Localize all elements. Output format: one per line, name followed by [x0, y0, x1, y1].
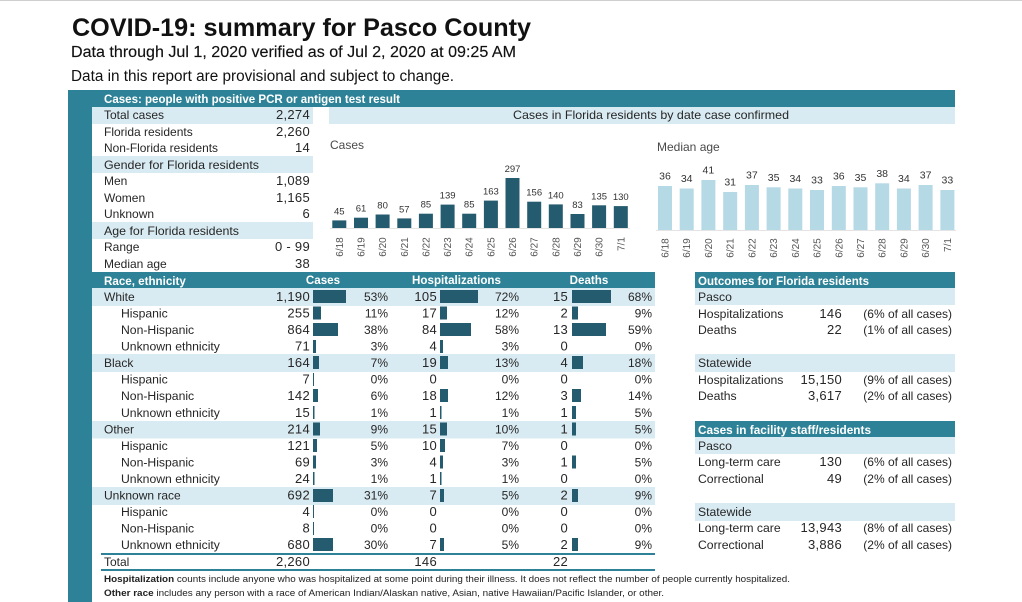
bar chart: median age: 7/1 [943, 238, 954, 252]
table header band: Hospitalizations [412, 274, 501, 287]
panel: outcomes for Florida residents [695, 272, 955, 403]
row: Black Non-Hispanic: 6% [371, 389, 388, 403]
row: White Hispanic: 9% [635, 306, 652, 320]
row: Statewide long-term care: 13,943 [800, 520, 842, 535]
row: Total: Total [104, 555, 129, 569]
row: White Non-Hispanic: 864 [287, 322, 310, 337]
table header band [92, 272, 655, 288]
row: Unknown race Non-Hispanic: 0% [502, 522, 519, 536]
row: Unknown race: 2 [560, 488, 568, 502]
row: Pasco hospitalizations: 146 [819, 306, 842, 321]
row: Unknown race: 5% [502, 488, 519, 502]
title: COVID-19: summary for Pasco County [72, 14, 531, 42]
row: Other unknown ethnicity: 1% [371, 472, 388, 486]
row: Other Hispanic: 0 [560, 438, 568, 453]
row: Black: 19 [422, 355, 437, 370]
row: Statewide correctional: (2% of all cases) [863, 538, 952, 552]
row: age heading: Age for Florida residents [104, 224, 239, 238]
row: Other unknown ethnicity: Unknown ethnicity [121, 472, 221, 486]
row: Statewide heading: Statewide [698, 356, 752, 370]
row: Other: 5% [635, 422, 652, 436]
row: women [104, 190, 310, 205]
row: White Hispanic: 12% [495, 306, 519, 320]
row: Unknown race Non-Hispanic: 8 [302, 520, 310, 536]
row: White Hispanic: 255 [287, 306, 310, 320]
row: White Non-Hispanic: 13 [553, 322, 568, 337]
row: Unknown race Hispanic: 0% [635, 505, 652, 519]
bar chart: daily cases: 6/22 [421, 237, 432, 257]
row: White Non-Hispanic [121, 322, 652, 337]
footnote: hospitalization: Hospitalization counts include anyone who was hospitalized at some point during their illness. It does not reflect the number of people currently hospitalized. [104, 574, 790, 584]
row: Pasco long-term care: 130 [819, 454, 842, 469]
chart heading band [329, 107, 955, 124]
row: Pasco deaths: (1% of all cases) [863, 323, 952, 337]
row: Unknown race unknown ethnicity: 30% [364, 538, 388, 552]
bar chart: median age: 6/27 [856, 238, 867, 258]
row: Other unknown ethnicity [121, 471, 652, 486]
row: Unknown race Hispanic: 0 [429, 504, 437, 519]
row: women: 1,165 [276, 190, 310, 205]
row: Statewide long-term care: (8% of all cases) [863, 521, 952, 535]
row: Black Non-Hispanic: 18 [422, 388, 437, 403]
row: Other unknown ethnicity: 1% [502, 472, 519, 486]
bar chart: median age: 34 [789, 173, 801, 185]
bar chart: median age: 37 [746, 170, 758, 182]
row: Unknown race Non-Hispanic: 0% [371, 522, 388, 536]
bar chart: median age: 6/30 [921, 238, 932, 258]
row: Statewide correctional [698, 537, 952, 552]
bar chart: daily cases: 6/21 [400, 237, 411, 257]
row: unknown gender [104, 206, 310, 221]
chart label: median age: Median age [657, 140, 720, 154]
row: Other Hispanic: 5% [371, 439, 388, 453]
row: White: 1,190 [276, 289, 310, 304]
bar chart: median age: 37 [920, 170, 932, 182]
row: White Non-Hispanic: 58% [495, 323, 519, 337]
row: Pasco deaths: Deaths [698, 323, 737, 337]
table header band: Race, ethnicity [104, 275, 186, 288]
row: White Non-Hispanic: 38% [364, 323, 388, 337]
row: Total: 146 [414, 554, 437, 569]
row: Pasco correctional: (2% of all cases) [863, 472, 952, 486]
row: Statewide long-term care: Long-term care [698, 521, 781, 535]
row: Unknown race Non-Hispanic: 0 [429, 520, 437, 536]
row: Black Hispanic: 0% [502, 372, 519, 386]
bar chart: daily cases: 156 [526, 188, 542, 199]
row: Black: 4 [560, 355, 568, 370]
row: Other Hispanic: 0% [635, 439, 652, 453]
row: Statewide hospitalizations: (9% of all cases) [863, 373, 952, 387]
row: Statewide hospitalizations: 15,150 [800, 372, 842, 387]
panel: cases header band: Cases: people with positive PCR or antigen test result [104, 93, 400, 106]
row: Unknown race unknown ethnicity: Unknown ethnicity [121, 538, 221, 552]
row: Statewide correctional: 3,886 [808, 537, 842, 552]
row: total cases [92, 107, 313, 124]
row: Statewide deaths: Deaths [698, 389, 737, 403]
bar chart: daily cases: 85 [421, 200, 431, 211]
row: White Hispanic [121, 306, 652, 320]
row: median age: 38 [295, 256, 310, 271]
row: Pasco correctional: Correctional [698, 472, 764, 486]
row: Black Hispanic: 7 [302, 372, 310, 386]
chart label: cases: Cases [330, 138, 364, 152]
row: Statewide hospitalizations: Hospitalizations [698, 373, 783, 387]
row: White: 68% [628, 290, 652, 304]
row: unknown gender: 6 [302, 206, 310, 221]
row: White: 72% [495, 290, 519, 304]
row: Black Non-Hispanic: 3 [560, 388, 568, 403]
row: men [104, 173, 310, 188]
row: White unknown ethnicity: 3% [502, 340, 519, 354]
row: Pasco heading: Pasco [698, 290, 732, 304]
bar chart: median age: 34 [681, 173, 693, 185]
row: White: 15 [553, 289, 568, 304]
row: Pasco long-term care: Long-term care [698, 455, 781, 469]
bar chart: median age: 33 [811, 174, 823, 186]
row: Unknown race unknown ethnicity: 680 [287, 537, 310, 552]
bar chart: daily cases: 6/28 [551, 237, 562, 257]
bar chart: daily cases: 6/26 [508, 237, 519, 257]
footnote: other race: Other race includes any person with a race of American Indian/Alaskan native, Asian, native Hawaiian/Pacific Islander, or other. [104, 588, 664, 598]
bar chart: daily cases: 6/30 [595, 237, 606, 257]
chart heading band: Cases in Florida residents by date case confirmed [513, 108, 789, 122]
bar chart: daily cases: 6/29 [573, 237, 584, 257]
row: gender heading [92, 156, 313, 173]
row: Statewide hospitalizations [698, 372, 952, 387]
bar chart: daily cases: 6/25 [486, 237, 497, 257]
row: Other unknown ethnicity: 24 [295, 471, 310, 486]
row: White Hispanic: 11% [365, 306, 388, 320]
row: Statewide heading [695, 354, 955, 372]
row: Statewide heading: Statewide [698, 505, 752, 519]
panel: case totals table [92, 107, 313, 271]
bar chart: daily cases: 130 [613, 192, 629, 203]
row: White: White [104, 290, 135, 304]
row: Unknown race unknown ethnicity: 2 [560, 537, 568, 552]
row: Other Non-Hispanic: 3% [502, 456, 519, 470]
bar chart: median age: 6/29 [899, 238, 910, 258]
panel: race and ethnicity table [92, 272, 655, 571]
row: Black: 13% [495, 356, 519, 370]
row: Black Hispanic: Hispanic [121, 372, 168, 386]
row: White [92, 288, 655, 306]
row: Statewide deaths: 3,617 [808, 388, 842, 403]
row: Unknown race unknown ethnicity: 5% [502, 538, 519, 552]
row: Other Non-Hispanic: 1 [560, 454, 568, 470]
row: White Hispanic: 17 [422, 306, 437, 320]
row: Pasco deaths: 22 [827, 322, 842, 337]
row: Other: Other [104, 422, 134, 436]
bar chart: median age: 6/19 [682, 238, 693, 258]
bar chart: daily cases: 6/20 [378, 237, 389, 257]
row: Black Hispanic: 0 [429, 372, 437, 386]
row: White unknown ethnicity: 0 [560, 338, 568, 354]
row: Black unknown ethnicity: 1 [560, 405, 568, 420]
row: Unknown race unknown ethnicity [121, 537, 652, 552]
row: median age: Median age [104, 257, 167, 271]
row: Florida residents [104, 124, 310, 139]
row: White Non-Hispanic: 84 [422, 322, 437, 337]
row: Other: 1 [560, 422, 568, 436]
row: Other: 9% [371, 422, 388, 436]
row: Black: 164 [287, 355, 310, 370]
row: Unknown race: 9% [635, 488, 652, 502]
bar chart: daily cases: 6/27 [530, 237, 541, 257]
row: Pasco long-term care: (6% of all cases) [863, 455, 952, 469]
row: White unknown ethnicity [121, 338, 652, 354]
row: Other Non-Hispanic: 69 [295, 454, 310, 470]
row: women: Women [104, 191, 145, 205]
row: Unknown race Hispanic: Hispanic [121, 505, 168, 519]
row: Unknown race Non-Hispanic: 0 [560, 520, 568, 536]
row: total cases: Total cases [104, 108, 164, 122]
row: White unknown ethnicity: 71 [295, 338, 310, 354]
row: age range [104, 239, 310, 254]
row: Unknown race [92, 487, 655, 505]
bar chart: daily cases: 85 [464, 200, 474, 211]
row: Florida residents: 2,260 [276, 124, 310, 139]
row: Black: 18% [628, 356, 652, 370]
row: men: 1,089 [276, 173, 310, 188]
table header band: Cases [306, 274, 340, 287]
row: Pasco deaths [698, 322, 952, 337]
row: Pasco correctional [698, 471, 952, 486]
bar chart: median age: 6/24 [791, 238, 802, 258]
row: Other Non-Hispanic: 5% [635, 456, 652, 470]
bar chart: median age: 31 [724, 176, 736, 188]
row: age range: 0 - 99 [275, 239, 310, 254]
row: Pasco correctional: 49 [827, 471, 842, 486]
row: Other Non-Hispanic: Non-Hispanic [121, 456, 194, 470]
row: Statewide deaths: (2% of all cases) [863, 389, 952, 403]
row: Other Hispanic [121, 438, 652, 453]
row: Other Hispanic: 7% [502, 439, 519, 453]
row: Other Non-Hispanic: 4 [429, 454, 437, 470]
bar chart: median age: 6/26 [834, 238, 845, 258]
row: Other Hispanic: Hispanic [121, 439, 168, 453]
bar chart: median age: 6/18 [660, 238, 672, 258]
row: Other unknown ethnicity: 0 [560, 471, 568, 486]
row: Unknown race Hispanic: 0% [502, 505, 519, 519]
row: Total: 22 [553, 554, 568, 569]
row: Black unknown ethnicity [121, 405, 652, 420]
bar chart: median age: 36 [659, 170, 671, 182]
row: Other unknown ethnicity: 0% [635, 472, 652, 486]
row: White unknown ethnicity: 4 [429, 338, 437, 354]
row: White unknown ethnicity: 3% [371, 340, 388, 354]
row: Statewide correctional: Correctional [698, 538, 764, 552]
row: Other Non-Hispanic: 3% [371, 456, 388, 470]
row: Pasco heading: Pasco [698, 439, 732, 453]
row: Florida residents: Florida residents [104, 125, 193, 139]
row: Black Non-Hispanic: Non-Hispanic [121, 389, 194, 403]
row: Other: 15 [422, 422, 437, 436]
row: White unknown ethnicity: Unknown ethnicity [121, 340, 221, 354]
row: Other unknown ethnicity: 1 [429, 471, 437, 486]
panel: cases in facility staff and residents [695, 421, 955, 552]
row: Black unknown ethnicity: 1% [371, 406, 388, 420]
row: White Non-Hispanic: Non-Hispanic [121, 323, 194, 337]
row: Black unknown ethnicity: Unknown ethnicity [121, 406, 221, 420]
row: Other: 10% [495, 422, 519, 436]
row: non-Florida residents: 14 [295, 140, 310, 155]
row: White Non-Hispanic: 59% [628, 323, 652, 337]
bar chart: daily cases: 163 [483, 187, 499, 198]
row: Pasco heading [695, 288, 955, 305]
row: Pasco hospitalizations: (6% of all cases) [863, 307, 952, 321]
table header band: Deaths [570, 274, 608, 287]
row: Black unknown ethnicity: 1 [429, 405, 437, 420]
bar chart: daily cases: 6/24 [465, 237, 476, 257]
row: Unknown race: 31% [364, 488, 388, 502]
bar chart: median age: 6/23 [769, 238, 780, 258]
row: White: 53% [364, 290, 388, 304]
bar chart: median age: 38 [876, 168, 888, 180]
row: Other [92, 421, 655, 438]
bar chart: daily cases: 140 [548, 190, 564, 201]
bar chart: median age: 6/22 [747, 238, 758, 258]
row: White Hispanic: 2 [560, 306, 568, 320]
row: Black Hispanic: 0% [371, 372, 388, 386]
row: total cases: 2,274 [276, 107, 310, 122]
row: Unknown race Non-Hispanic: Non-Hispanic [121, 522, 194, 536]
row: Statewide heading [695, 503, 955, 521]
bar chart: median age: 33 [942, 174, 953, 186]
row: median age [104, 256, 310, 271]
bar chart: daily cases: 135 [591, 191, 607, 202]
bar chart: median age: 36 [833, 170, 845, 182]
row: Pasco hospitalizations: Hospitalizations [698, 307, 783, 321]
row: non-Florida residents [104, 140, 310, 155]
bar chart: median age: 34 [898, 173, 910, 185]
row: Black: 7% [371, 356, 388, 370]
row: Pasco heading [695, 437, 955, 454]
row: Black Hispanic: 0 [560, 372, 568, 386]
row: Pasco hospitalizations [698, 306, 952, 321]
bar chart: daily cases: 45 [334, 206, 345, 217]
bar chart: daily cases: 297 [505, 164, 520, 175]
row: White Hispanic: Hispanic [121, 306, 168, 320]
subtitle: data date: Data through Jul 1, 2020 verified as of Jul 2, 2020 at 09:25 AM [71, 44, 516, 61]
bar chart: median age [656, 140, 956, 258]
bar chart: median age: 6/20 [704, 238, 715, 258]
bar chart: daily cases: 57 [399, 204, 410, 215]
row: Black Non-Hispanic: 14% [628, 389, 652, 403]
bar chart: median age: 6/28 [878, 238, 889, 258]
row: Pasco long-term care [698, 454, 952, 469]
bar chart: median age: 6/25 [812, 238, 824, 258]
row: Total [101, 553, 655, 571]
row: Black unknown ethnicity: 5% [635, 406, 652, 420]
row: Black [92, 354, 655, 372]
bar chart: daily cases: 6/23 [443, 237, 454, 257]
bar chart: daily cases: 80 [377, 200, 388, 212]
row: Unknown race Hispanic [121, 504, 652, 519]
row: Other Non-Hispanic [121, 454, 652, 470]
row: Black Non-Hispanic: 142 [287, 388, 310, 403]
row: Unknown race: 7 [429, 488, 437, 502]
row: White: 105 [414, 289, 437, 304]
row: Black: Black [104, 356, 134, 370]
bar chart: daily cases: 6/18 [335, 237, 346, 257]
bar chart: daily cases: 6/19 [356, 237, 368, 257]
bar chart: median age: 35 [768, 172, 780, 184]
row: age range: Range [104, 240, 140, 254]
row: men: Men [104, 174, 127, 188]
bar chart: median age: 35 [855, 172, 866, 184]
bar chart: median age: 41 [703, 164, 714, 176]
row: Statewide long-term care [698, 520, 952, 535]
row: Unknown race Hispanic: 4 [302, 504, 310, 519]
panel: cases header band [68, 90, 955, 107]
row: Unknown race unknown ethnicity: 9% [635, 538, 652, 552]
row: Black unknown ethnicity: 15 [295, 405, 310, 420]
row: gender heading: Gender for Florida residents [104, 158, 259, 172]
row: White unknown ethnicity: 0% [635, 340, 652, 354]
bar chart: daily cases: 61 [356, 204, 366, 215]
row: Black Non-Hispanic: 12% [495, 389, 519, 403]
subtitle: provisional notice: Data in this report are provisional and subject to change. [71, 68, 454, 85]
row: Black Hispanic: 0% [635, 372, 652, 386]
row: Unknown race: 692 [287, 488, 310, 502]
row: Unknown race Hispanic: 0% [371, 505, 388, 519]
row: Unknown race: Unknown race [104, 488, 181, 502]
row: age heading [92, 222, 313, 239]
row: Unknown race unknown ethnicity: 7 [429, 537, 437, 552]
row: Statewide deaths [698, 388, 952, 403]
bar chart: median age: 6/21 [726, 238, 737, 258]
row: Black Hispanic [121, 372, 652, 386]
row: Black unknown ethnicity: 1% [502, 406, 519, 420]
row: unknown gender: Unknown [104, 207, 154, 221]
left teal sidebar [68, 90, 92, 602]
row: Other Hispanic: 121 [287, 438, 310, 453]
row: Unknown race Hispanic: 0 [560, 504, 568, 519]
row: Unknown race Non-Hispanic [121, 520, 652, 536]
row: Black Non-Hispanic [121, 388, 652, 403]
bar chart: daily cases: 83 [572, 200, 583, 211]
row: non-Florida residents: Non-Florida residents [104, 141, 218, 155]
bar chart: daily cases [330, 138, 630, 257]
bar chart: daily cases: 7/1 [616, 237, 627, 251]
bar chart: daily cases: 139 [440, 191, 456, 202]
panel: cases in facility staff and residents: Cases in facility staff/residents [698, 424, 871, 437]
row: Total: 2,260 [276, 554, 310, 569]
row: Unknown race Non-Hispanic: 0% [635, 522, 652, 536]
row: Other Hispanic: 10 [422, 438, 437, 453]
panel: outcomes for Florida residents: Outcomes for Florida residents [698, 275, 869, 288]
row: Other: 214 [287, 422, 310, 436]
